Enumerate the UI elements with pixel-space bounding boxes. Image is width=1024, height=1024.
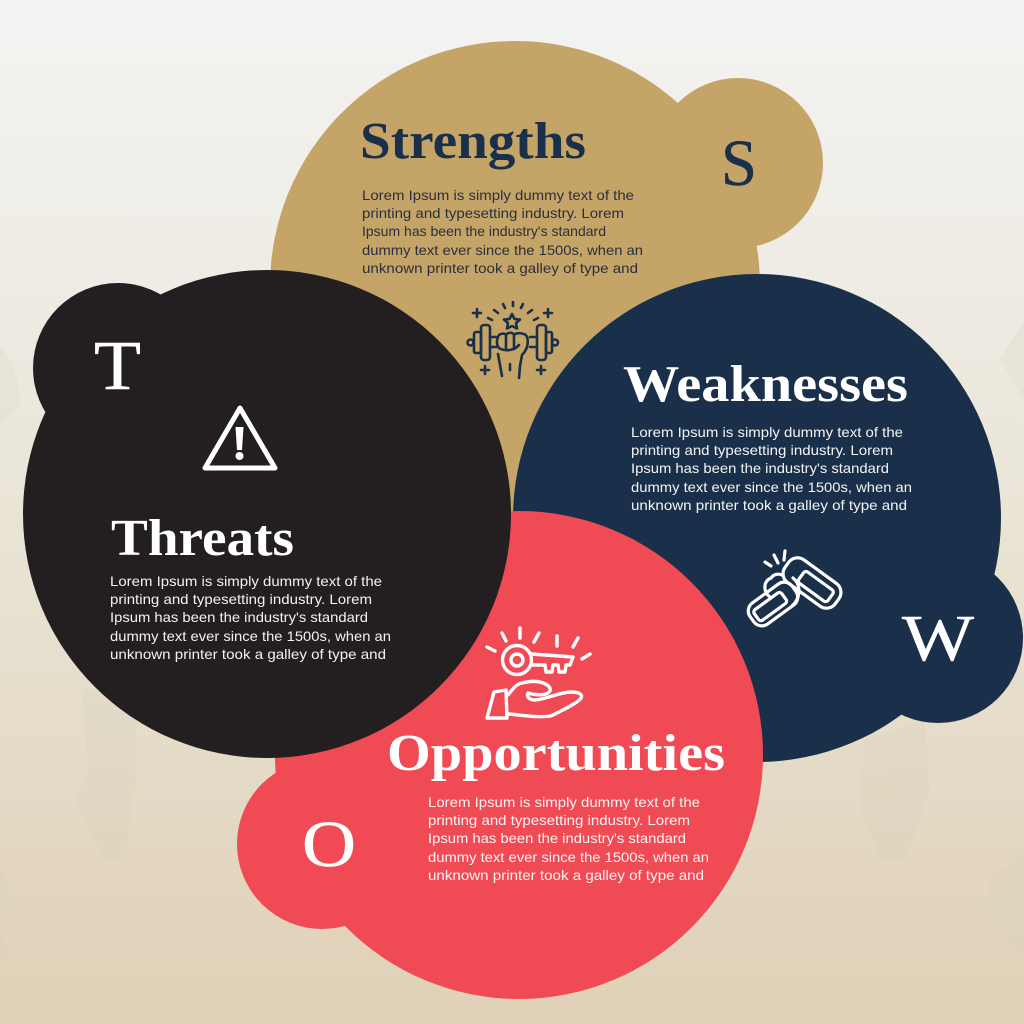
opportunities shape <box>237 511 763 999</box>
threats letter: T <box>94 328 141 405</box>
strengths body text: Ipsum has been the industry's standard <box>362 223 606 239</box>
weaknesses body text <box>631 424 912 513</box>
weaknesses body text: printing and typesetting industry. Lorem <box>631 442 893 458</box>
threats heading: Threats <box>111 510 294 567</box>
icon: warning triangle <box>205 408 275 468</box>
icon: fist with dumbbell <box>468 302 558 378</box>
threats body text <box>110 573 391 662</box>
threats body text: Lorem Ipsum is simply dummy text of the <box>110 573 382 589</box>
panel: strengths <box>270 41 823 531</box>
strengths body text: printing and typesetting industry. Lorem <box>362 205 624 221</box>
opportunities body text: dummy text ever since the 1500s, when an <box>428 849 709 865</box>
strengths body text: Lorem Ipsum is simply dummy text of the <box>362 187 634 203</box>
strengths shape <box>270 41 823 531</box>
opportunities heading: Opportunities <box>387 725 725 782</box>
weaknesses shape <box>513 274 1023 762</box>
opportunities body text: unknown printer took a galley of type and <box>428 867 704 883</box>
weaknesses body text: dummy text ever since the 1500s, when an <box>631 479 912 495</box>
weaknesses body text: unknown printer took a galley of type and <box>631 497 907 513</box>
weaknesses letter: W <box>902 602 975 675</box>
strengths body text: unknown printer took a galley of type and <box>362 260 638 276</box>
weaknesses body text: Lorem Ipsum is simply dummy text of the <box>631 424 903 440</box>
panel: weaknesses <box>513 274 1023 762</box>
strengths heading: Strengths <box>360 113 586 170</box>
threats body text: printing and typesetting industry. Lorem <box>110 591 372 607</box>
strengths body text <box>362 187 643 276</box>
opportunities letter: O <box>302 808 356 881</box>
threats body text: unknown printer took a galley of type and <box>110 646 386 662</box>
icon: broken chain <box>744 551 845 630</box>
opportunities body text <box>428 794 709 883</box>
opportunities body text: printing and typesetting industry. Lorem <box>428 812 690 828</box>
weaknesses body text: Ipsum has been the industry's standard <box>631 460 889 476</box>
panel: opportunities <box>237 511 763 999</box>
strengths body text: dummy text ever since the 1500s, when an <box>362 242 643 258</box>
weaknesses heading: Weaknesses <box>623 356 908 413</box>
icon: key over hand <box>487 628 590 718</box>
strengths letter: S <box>721 127 757 200</box>
opportunities body text: Ipsum has been the industry's standard <box>428 830 686 846</box>
opportunities body text: Lorem Ipsum is simply dummy text of the <box>428 794 700 810</box>
threats shape <box>23 270 511 758</box>
threats body text: dummy text ever since the 1500s, when an <box>110 628 391 644</box>
panel: threats <box>23 270 511 758</box>
threats body text: Ipsum has been the industry's standard <box>110 609 368 625</box>
